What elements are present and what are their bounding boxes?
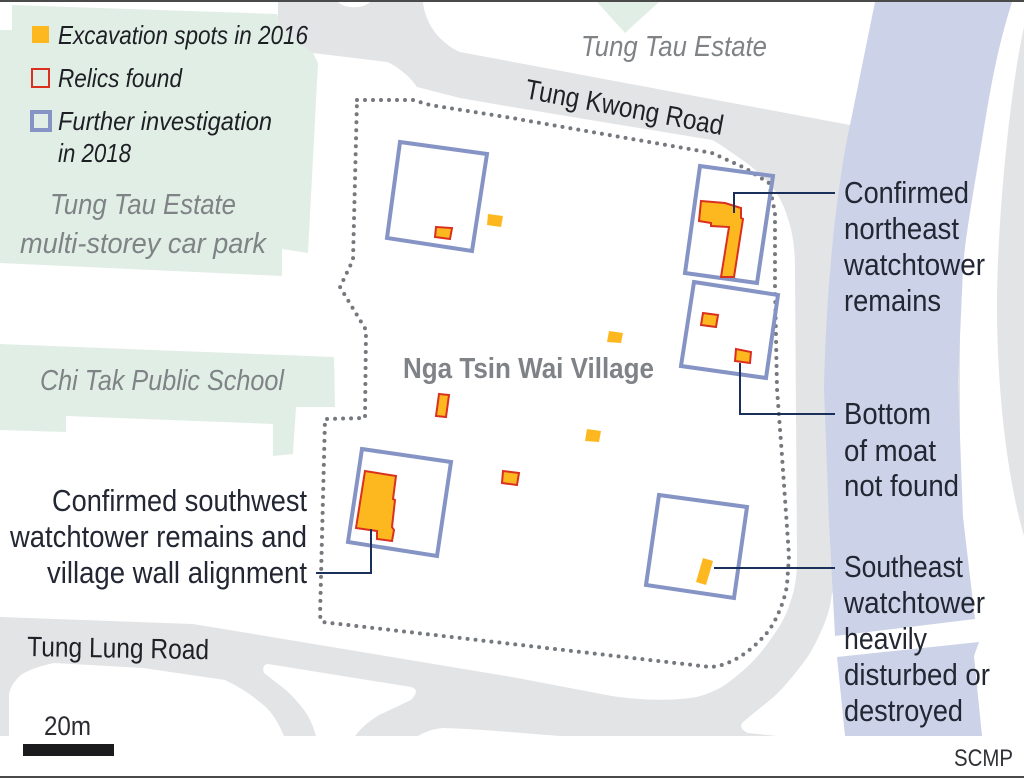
investigation area: east: [681, 282, 778, 378]
legend label: further investigation: [58, 106, 272, 168]
callout: southeast watchtower: disturbed or: [844, 657, 990, 692]
leader line: northeast: [734, 193, 835, 213]
legend label: excavation spots: Excavation spots in 2016: [58, 20, 308, 50]
investigation area: north-east: [685, 166, 773, 283]
relic: east upper: [701, 313, 718, 327]
park: Tung Tau Estate grounds: [597, 2, 659, 33]
label: Tung Tau Estate multi-storey car park: Tung Tau Estate: [50, 189, 236, 221]
legend label: further investigation: in 2018: [58, 138, 131, 168]
investigation area: south-west: [348, 449, 451, 556]
callout: southeast watchtower: destroyed: [844, 693, 963, 728]
callout: southwest watchtower: watchtower remains and: [9, 519, 307, 554]
relic: southwest watchtower: [356, 471, 396, 541]
leader line: southwest: [316, 529, 371, 573]
source credit: SCMP: [954, 745, 1013, 772]
relic: [436, 394, 449, 417]
callout: southwest watchtower: Confirmed southwest: [52, 483, 307, 518]
label: Tung Tau Estate: Tung Tau Estate: [581, 31, 767, 63]
label: Tung Tau Estate multi-storey car park: [20, 189, 267, 260]
callout: northeast watchtower: remains: [844, 283, 941, 318]
callout: northeast watchtower: watchtower: [843, 247, 985, 282]
callout: southeast watchtower: watchtower: [843, 585, 985, 620]
callout: southeast watchtower: [843, 549, 990, 728]
callout: northeast watchtower: Confirmed: [844, 175, 969, 210]
moat upper: [824, 2, 1012, 636]
callout: bottom of moat: Bottom: [844, 396, 931, 431]
legend swatch: excavation spots: [32, 26, 49, 43]
excavation spot: [607, 331, 623, 343]
callout: northeast watchtower: [843, 175, 985, 318]
legend label: further investigation: Further investigation: [58, 106, 272, 136]
callout: bottom of moat: of moat: [844, 433, 936, 468]
top rule: [0, 0, 1024, 2]
legend: [32, 20, 308, 168]
relic: east lower: [735, 349, 751, 363]
label: Tung Kwong Road: Tung Kwong Road: [523, 73, 726, 141]
callout: southwest watchtower: [9, 483, 307, 590]
excavation spot: southeast watchtower: [696, 558, 713, 585]
footer band: [0, 736, 1024, 776]
leader line: southeast: [714, 567, 835, 569]
label: Tung Tau Estate multi-storey car park: multi-storey car park: [20, 228, 267, 260]
road: traffic island: [263, 664, 416, 736]
callout: southwest watchtower: village wall alignment: [47, 555, 307, 590]
callout: southeast watchtower: heavily: [844, 621, 927, 656]
scale bar: [23, 711, 114, 756]
callout: bottom of moat: not found: [844, 468, 959, 503]
park: Chi Tak Public School grounds: [0, 344, 335, 456]
excavation spot: [585, 429, 601, 442]
scale bar: 20m: [44, 711, 91, 741]
legend swatch: further investigation: [32, 112, 50, 130]
label: Tung Lung Road: Tung Lung Road: [27, 631, 209, 665]
legend label: relics: Relics found: [58, 63, 183, 93]
village boundary dotted line: [320, 100, 789, 667]
excavation spot: [487, 214, 503, 227]
legend swatch: relics: [32, 69, 49, 87]
bottom rule: [0, 776, 1024, 778]
park: Tung Tau Estate multi-storey car park: [0, 5, 318, 276]
moat lower: [837, 642, 982, 736]
relic: northeast watchtower: [699, 201, 743, 277]
callout: northeast watchtower: northeast: [844, 211, 959, 246]
investigation area: north-west: [387, 142, 487, 251]
callout: bottom of moat: [844, 396, 959, 503]
callout: southeast watchtower: Southeast: [844, 549, 963, 584]
label: Chi Tak Public School: Chi Tak Public School: [40, 365, 285, 397]
relic: north-west: [435, 227, 452, 239]
road: right edge strip: [997, 27, 1024, 536]
label: Nga Tsin Wai Village: Nga Tsin Wai Village: [403, 353, 654, 385]
leader line: moat: [740, 363, 835, 414]
investigation area: south-east: [646, 495, 747, 598]
relic: [502, 471, 519, 485]
